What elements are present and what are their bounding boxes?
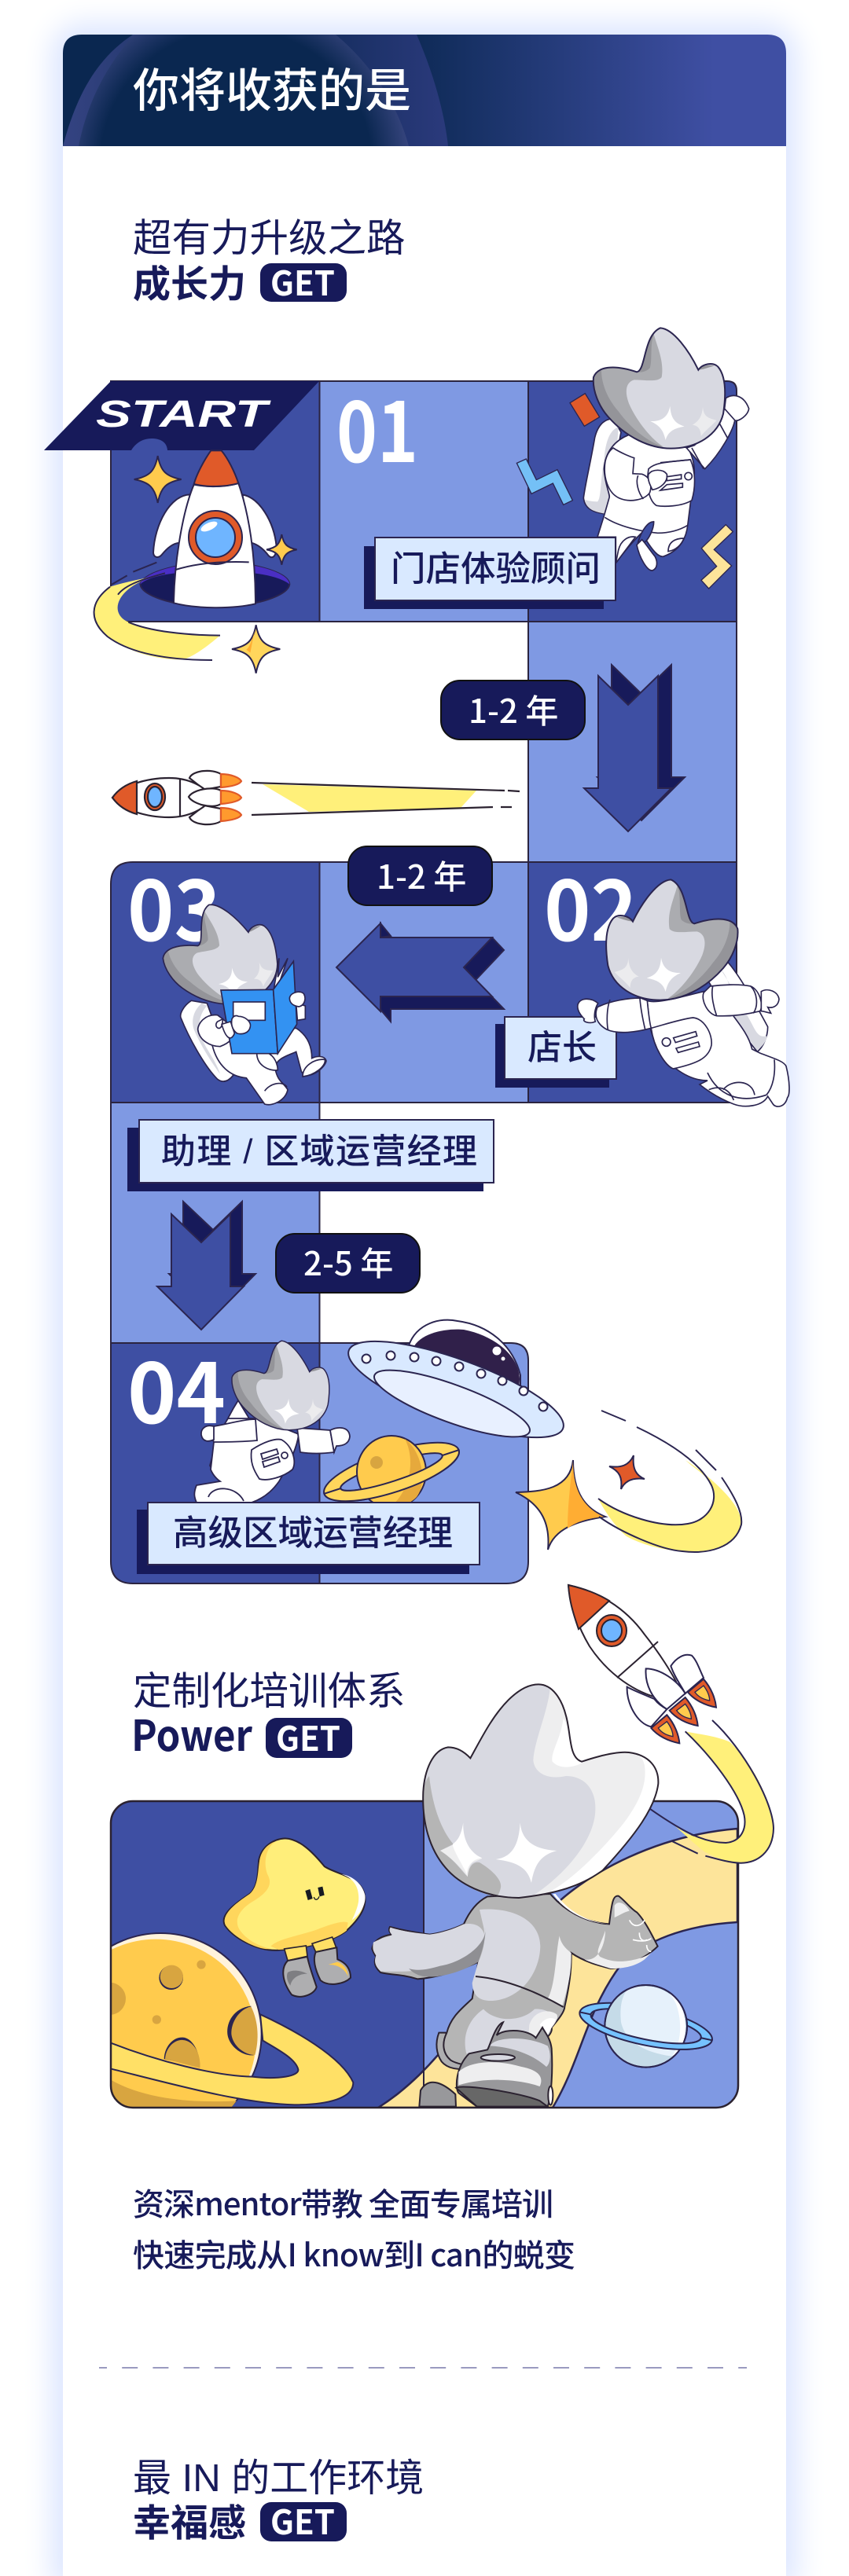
label: 门店体验顾问 [364, 538, 616, 609]
astronaut 1 [583, 328, 749, 571]
pill: 2-5 years [276, 1234, 420, 1293]
icon: UFO [339, 1320, 573, 1456]
arrow: down 1 [584, 665, 685, 831]
icon: ringed white planet [576, 1985, 716, 2068]
label: 店长 [495, 1017, 616, 1088]
icon: flying rocket [112, 771, 520, 824]
step number 01: 01 [336, 367, 418, 486]
icon: stars and crescent [516, 1411, 741, 1552]
icon: rocket launching from hole [94, 450, 297, 673]
START banner: START [96, 394, 271, 435]
path grid: career board [111, 381, 737, 1583]
label: 店长: 店长 [527, 1029, 597, 1067]
heading: happiness [133, 2457, 424, 2545]
heading: growth: GET [270, 257, 335, 306]
astronaut 4 [194, 1341, 350, 1503]
heading: training [131, 1670, 406, 1763]
step number 03: 03 [127, 846, 221, 965]
heading: growth: 超有力升级之路 [133, 217, 406, 260]
pill: 1-2 years [441, 681, 585, 739]
description text [133, 2179, 575, 2276]
rocket thrusters and trail [627, 1655, 774, 1863]
label: 高级区域运营经理 [137, 1503, 480, 1574]
astronaut 2 [578, 879, 789, 1106]
panel: training scene [110, 1800, 739, 2109]
arrow: down 2 [157, 1202, 255, 1330]
pill: 1-2 years second: 1-2 年 [377, 851, 466, 899]
icon: decorative shapes [516, 394, 733, 589]
icon: big astronaut body [372, 1894, 658, 2107]
arrow: left [336, 923, 504, 1022]
heading: growth: 成长力 [133, 264, 246, 306]
label: 助理 / 区域运营经理 [127, 1120, 494, 1191]
header banner [63, 35, 786, 146]
START banner [44, 381, 319, 450]
step number 04: 04 [127, 1328, 226, 1448]
icon: ringed planet [318, 1430, 465, 1514]
header title: 你将收获的是 [133, 65, 411, 117]
torso and arms [372, 1894, 658, 2067]
description text: 资深mentor带教 全面专属培训 [133, 2179, 553, 2225]
planet with craters [112, 1932, 354, 2107]
heading: growth [133, 217, 406, 306]
rocket hull [568, 1585, 676, 1697]
icon: big astronaut helmet [423, 1684, 658, 1898]
pill: 1-2 years second [348, 846, 492, 905]
heading: happiness: 幸福感 [133, 2503, 246, 2545]
right shoe [457, 2022, 552, 2107]
label: 高级区域运营经理: 高级区域运营经理 [173, 1514, 453, 1553]
label: 门店体验顾问: 门店体验顾问 [391, 550, 601, 589]
heading: training: Power [131, 1701, 252, 1763]
label: 助理 / 区域运营经理: 助理 / 区域运营经理 [161, 1132, 477, 1171]
heading: happiness: 最 IN 的工作环境 [133, 2457, 424, 2500]
heading: training: 定制化培训体系 [133, 1670, 406, 1713]
heading: training: GET [276, 1712, 340, 1761]
pill: 2-5 years: 2-5 年 [303, 1238, 393, 1286]
astronaut 3 reading [153, 893, 326, 1105]
icon: diagonal rocket with tail [568, 1585, 774, 1863]
pill: 1-2 years: 1-2 年 [469, 685, 558, 733]
astronaut 3 body and book [181, 958, 326, 1105]
step number 02: 02 [544, 846, 638, 965]
description text: 快速完成从I know到I can的蜕变 [133, 2230, 575, 2276]
icon: yellow mascot [224, 1838, 366, 1997]
left shoe [419, 2082, 456, 2107]
heading: happiness: GET [270, 2496, 335, 2545]
